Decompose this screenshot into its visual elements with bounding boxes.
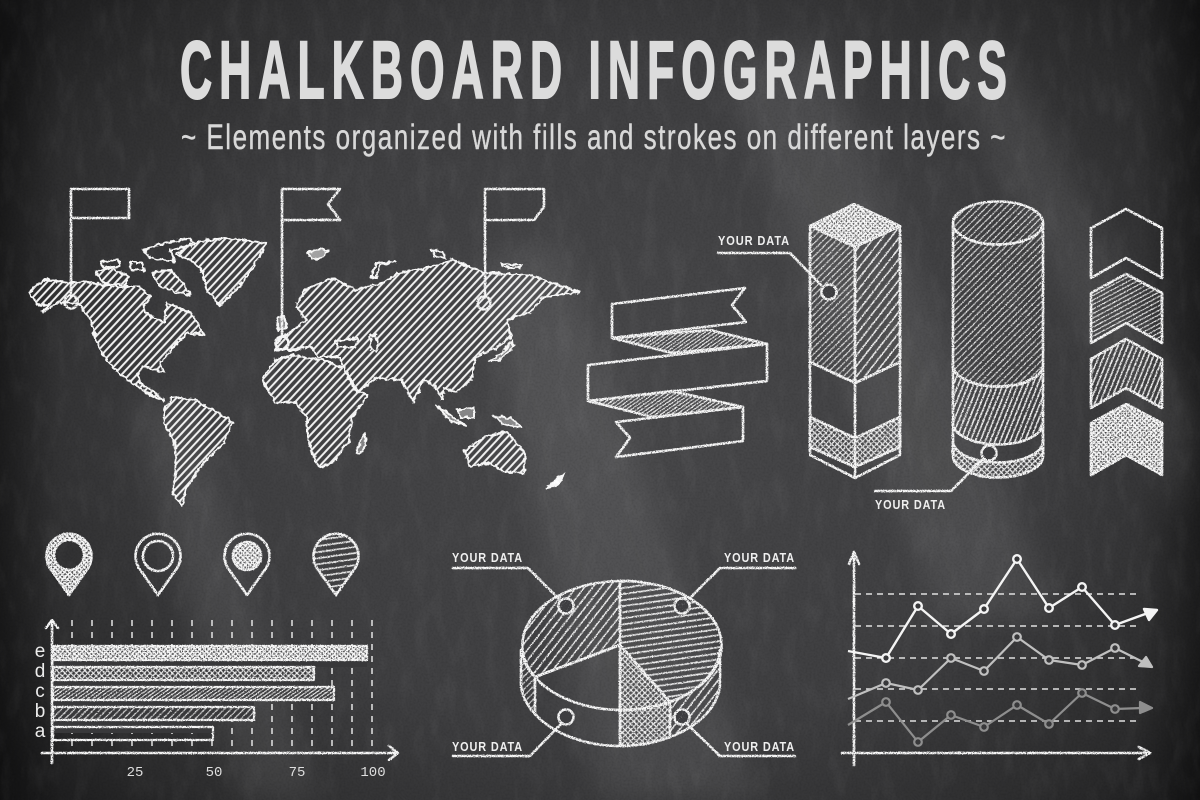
pie left side face	[521, 650, 535, 714]
bar e	[53, 646, 367, 660]
bar chart category labels	[35, 641, 46, 742]
panel: line chart	[842, 552, 1157, 765]
panel: folded ribbon banner	[588, 288, 767, 457]
line series 1	[848, 555, 1157, 662]
ribbon top segment	[612, 288, 746, 338]
bar chart value labels: 100	[360, 765, 386, 781]
chevron steep hatch	[1091, 339, 1162, 408]
australia	[465, 432, 525, 473]
ribbon bottom segment	[616, 407, 743, 457]
cylinder sides	[953, 423, 1043, 456]
bar chart category labels: c	[35, 681, 45, 702]
box cross-hatched band	[810, 417, 900, 467]
bar c	[53, 687, 334, 700]
pie labels	[452, 551, 795, 754]
world map outlines	[29, 238, 580, 505]
arctic islands	[95, 238, 195, 295]
cylinder mid hatched section	[953, 365, 1043, 445]
flag: cut corner	[478, 189, 544, 310]
pin: stippled dot	[224, 534, 270, 595]
pie leaders and markers	[453, 568, 795, 756]
asian islands	[356, 340, 523, 454]
flag: swallowtail	[276, 189, 340, 350]
bar a	[53, 727, 213, 740]
bar chart value labels: 50	[206, 765, 222, 781]
africa	[262, 355, 367, 467]
bar chart category labels: a	[35, 721, 46, 742]
panel: 3D pie chart	[452, 551, 795, 756]
bar chart value labels: 25	[127, 765, 143, 781]
box upper left face	[810, 226, 855, 383]
eurasia	[275, 260, 580, 402]
box top face	[810, 204, 900, 247]
bar chart value labels: 75	[289, 765, 305, 781]
pie labels: YOUR DATA	[724, 740, 795, 754]
panel: world map with flags	[29, 189, 580, 505]
pie labels: YOUR DATA	[452, 551, 523, 565]
bar d	[53, 667, 314, 680]
novaya zemlya and arctic arc	[371, 250, 522, 278]
pin: textured ring	[47, 534, 92, 595]
iceland	[307, 249, 329, 259]
cylinder base band	[953, 441, 1043, 478]
chevron shallow hatch	[1091, 274, 1162, 343]
label: cylinder data: YOUR DATA	[875, 498, 946, 512]
bar chart value labels	[127, 765, 386, 781]
south america	[164, 397, 233, 505]
leader: box	[718, 253, 821, 285]
marker: cylinder	[982, 446, 996, 460]
chevron cross hatch	[1091, 404, 1162, 475]
pie labels: YOUR DATA	[452, 740, 523, 754]
cylinder top ellipse	[953, 202, 1043, 244]
pie labels: YOUR DATA	[724, 551, 795, 565]
new zealand	[547, 473, 564, 488]
bar b	[53, 707, 254, 720]
pie removed wedge	[535, 645, 620, 746]
pie right side face	[670, 650, 720, 737]
pie slice: cross hatched top	[620, 645, 670, 710]
pin: outlined ring	[136, 534, 180, 595]
bar chart axes	[42, 620, 398, 763]
chevron empty	[1091, 209, 1162, 278]
panel: 3D box column	[718, 204, 900, 478]
marker: box	[822, 284, 836, 300]
line chart grid	[855, 594, 1138, 721]
leader: cylinder	[875, 460, 982, 491]
box outline	[810, 226, 900, 478]
bar chart category labels: b	[35, 701, 45, 722]
pie front cross hatched face	[620, 702, 670, 746]
panel: 3D cylinder	[875, 202, 1043, 491]
panel: horizontal bar chart	[35, 620, 398, 781]
pie chart drawing	[521, 581, 722, 746]
bar chart category labels: e	[35, 641, 45, 662]
bar chart category labels: d	[35, 661, 45, 682]
panel: chevrons	[1091, 209, 1162, 475]
ribbon second fold	[588, 391, 743, 417]
label: box data: YOUR DATA	[718, 234, 790, 248]
north america	[29, 279, 205, 400]
panel: map pins	[47, 534, 359, 595]
pie slice: upper left	[522, 581, 620, 677]
greenland	[176, 238, 267, 306]
flag: rectangular	[64, 189, 129, 308]
line series 3	[848, 689, 1152, 746]
map hatching	[29, 238, 580, 505]
box upper right face	[855, 226, 900, 383]
cylinder upper hatched section	[953, 223, 1043, 386]
united kingdom	[277, 316, 287, 330]
bar chart backing	[53, 646, 367, 733]
ribbon first fold	[612, 330, 767, 353]
line chart axes	[842, 552, 1150, 765]
pie slice: upper right	[620, 581, 722, 702]
pin: striped	[314, 534, 359, 595]
line series 2	[848, 633, 1152, 699]
ribbon middle segment	[588, 344, 767, 401]
bar chart grid	[72, 620, 372, 752]
bar chart bars	[53, 646, 367, 740]
